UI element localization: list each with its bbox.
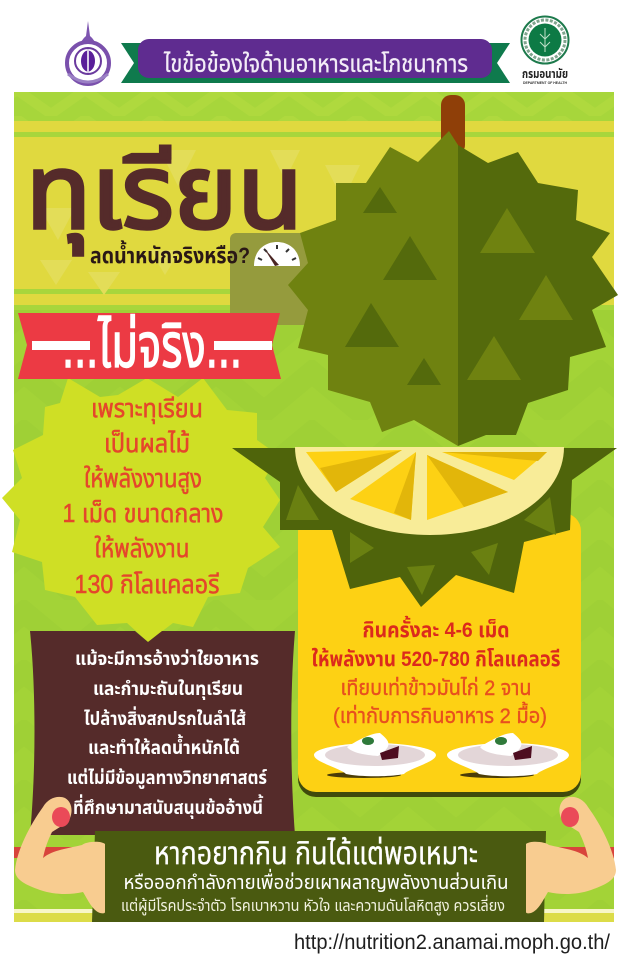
panel: advice box [92,831,546,922]
icon: weight scale gauge [254,242,300,266]
spikes: dark on left half [345,187,441,385]
explanation text [67,648,267,819]
yellow panel text: ให้พลังงาน 520-780 กิโลแคลอรี [312,648,561,671]
explanation text: แต่ไม่มีข้อมูลทางวิทยาศาสตร์ [67,767,267,789]
icon: right flexing arm [526,797,616,913]
starburst text: 130 กิโลแคลอรี [74,569,220,599]
panel: claim explanation [30,631,295,835]
starburst text [62,393,224,599]
spikes on cut half [286,485,556,595]
source url: http://nutrition2.anamai.moph.go.th/ [294,931,610,954]
subtitle: does it really reduce weight: ลดน้ำหนักจริงหรือ? [90,240,250,268]
olive box behind durian [230,233,315,325]
logo caption: กรมอนามัย [522,67,568,81]
banner: not true [18,312,281,381]
logo: Department of Health [522,16,568,85]
starburst text: 1 เม็ด ขนาดกลาง [62,498,224,528]
yellow panel text: กินครั้งละ 4-6 เม็ด [362,616,510,642]
banner title: ไขข้อข้องใจด้านอาหารและโภชนาการ [163,50,468,78]
flesh segments [306,450,402,492]
logo: left institute emblem [67,21,109,84]
durian: cut half [232,447,617,607]
flesh rim [295,447,564,535]
spikes: light on right half [467,208,573,380]
starburst text: เพราะทุเรียน [91,393,203,424]
explanation text: ไปล้างสิ่งสกปรกในลำไส้ [84,706,246,730]
explanation text: ที่ศึกษามาสนับสนุนข้ออ้างนี้ [73,794,264,819]
logo caption english: DEPARTMENT OF HEALTH [523,80,567,85]
yellow info panel [298,513,581,797]
advice line two: หรือออกกำลังกายเพื่อช่วยเผาผลาญพลังงานส่วนเกิน [124,868,508,894]
advice headline: หากอยากกิน กินได้แต่พอเหมาะ [154,835,478,871]
explanation text: และกำมะถันในทุเรียน [93,679,243,700]
durian stem [441,95,465,155]
explanation text: และทำให้ลดน้ำหนักได้ [88,734,240,759]
banner: header ribbon [121,39,510,83]
advice line three: แต่ผู้มีโรคประจำตัว โรคเบาหวาน หัวใจ และความดันโลหิตสูง ควรเลี่ยง [121,894,505,915]
yellow panel text: เทียบเท่าข้าวมันไก่ 2 จาน [340,676,532,700]
icon: chicken rice plate left [314,733,436,778]
yellow panel text [312,616,561,728]
yellow panel text: (เท่ากับการกินอาหาร 2 มื้อ) [333,701,547,728]
icon: chicken rice plate right [447,733,569,778]
durian: whole fruit [288,131,618,446]
starburst: energy callout [2,378,280,642]
title: durian: ทุเรียน [26,135,303,255]
starburst text: เป็นผลไม้ [104,428,190,458]
starburst text: ให้พลังงานสูง [84,463,202,494]
icon: left flexing arm [15,797,105,913]
banner text: ...ไม่จริง... [62,312,242,381]
starburst text: ให้พลังงาน [94,533,190,563]
explanation text: แม้จะมีการอ้างว่าใยอาหาร [75,648,259,670]
